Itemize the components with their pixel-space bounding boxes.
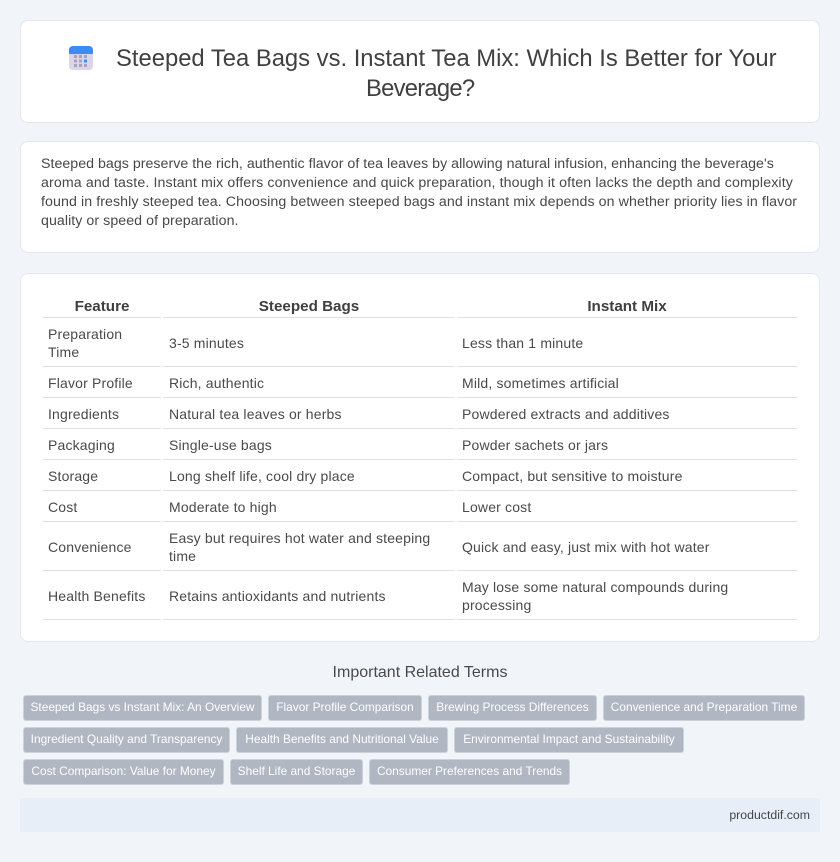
title: Beverage? <box>366 75 474 102</box>
table header: Instant Mix <box>587 298 667 315</box>
table header: Steeped Bags <box>259 298 359 315</box>
text: introduction <box>41 156 797 229</box>
table rows: Compact, but sensitive to moisture <box>462 468 683 484</box>
related term tags: Consumer Preferences and Trends <box>377 764 562 778</box>
related term tags: Flavor Profile Comparison <box>276 700 414 714</box>
table rows: time <box>169 548 196 564</box>
table rows: Cost <box>48 499 77 515</box>
icon: calendar grid <box>69 46 93 70</box>
title <box>116 45 777 102</box>
related term tags: Brewing Process Differences <box>436 700 589 714</box>
table header: Feature <box>75 298 129 315</box>
table rows <box>43 326 797 620</box>
table rows: May lose some natural compounds during <box>462 579 728 595</box>
related term tags: Environmental Impact and Sustainability <box>463 732 675 746</box>
table rows: Rich, authentic <box>169 375 264 391</box>
related term tags <box>23 695 805 785</box>
table rows: Ingredients <box>48 406 119 422</box>
panel: comparison table card <box>20 273 820 642</box>
table rows: Moderate to high <box>169 499 277 515</box>
table rows: Quick and easy, just mix with hot water <box>462 539 710 555</box>
table rows: Powdered extracts and additives <box>462 406 670 422</box>
text: introduction: aroma and taste. Instant mix offers convenience and quick preparation, though it often lacks the depth and complexity <box>41 175 793 191</box>
table rows: Convenience <box>48 539 132 555</box>
footer bar <box>20 798 820 832</box>
related term tags: Convenience and Preparation Time <box>611 700 797 714</box>
table rows: Storage <box>48 468 98 484</box>
related term tags: Ingredient Quality and Transparency <box>31 732 222 746</box>
text: introduction: Steeped bags preserve the rich, authentic flavor of tea leaves by allowing natural infusion, enhancing the beverage's <box>41 156 774 172</box>
table rows: Retains antioxidants and nutrients <box>169 588 386 604</box>
text: introduction: quality or speed of preparation. <box>41 213 239 229</box>
table rows: Flavor Profile <box>48 375 133 391</box>
table rows: Less than 1 minute <box>462 335 583 351</box>
table rows: Packaging <box>48 437 115 453</box>
table rows: Preparation <box>48 326 122 342</box>
title: Steeped Tea Bags vs. Instant Tea Mix: Which Is Better for Your <box>116 45 777 72</box>
related term tags: Cost Comparison: Value for Money <box>31 764 216 778</box>
table rows: 3-5 minutes <box>169 335 244 351</box>
table rows: Single-use bags <box>169 437 272 453</box>
panel: title card <box>20 20 820 123</box>
table rows: processing <box>462 597 531 613</box>
table rows: Health Benefits <box>48 588 146 604</box>
heading: related terms: Important Related Terms <box>333 664 507 681</box>
table rows: Mild, sometimes artificial <box>462 375 619 391</box>
related term tags: Steeped Bags vs Instant Mix: An Overview <box>30 700 255 714</box>
table rows: Time <box>48 344 79 360</box>
table rows: Lower cost <box>462 499 531 515</box>
related term tags: Health Benefits and Nutritional Value <box>245 732 439 746</box>
comparison table <box>43 298 797 620</box>
table rows: Natural tea leaves or herbs <box>169 406 342 422</box>
text: introduction: found in freshly steeped tea. Choosing between steeped bags and instant mix depends on whether priority lies in flavor <box>41 194 797 210</box>
related term tags: Shelf Life and Storage <box>238 764 355 778</box>
footer text: source: productdif.com <box>729 808 810 822</box>
table rows: Long shelf life, cool dry place <box>169 468 355 484</box>
table header <box>43 298 797 318</box>
table rows: Powder sachets or jars <box>462 437 608 453</box>
table rows: Easy but requires hot water and steeping <box>169 530 430 546</box>
panel: intro card <box>20 141 820 253</box>
